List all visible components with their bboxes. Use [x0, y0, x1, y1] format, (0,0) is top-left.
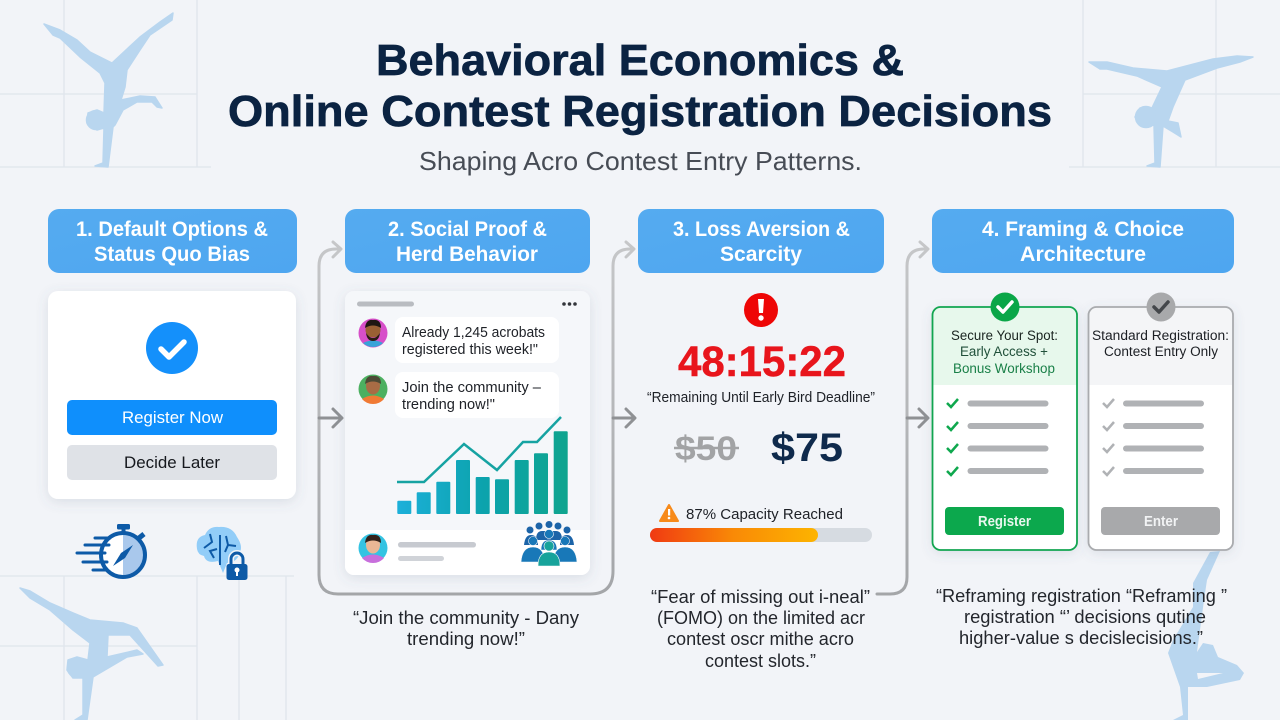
heading: step 1: [48, 209, 297, 273]
countdown timer: 48:15:22: [678, 338, 846, 386]
panel: loss aversion: [638, 209, 884, 671]
icon: alert: [744, 293, 778, 327]
caption: framing: “Reframing registration “Reframing ”: [936, 586, 1227, 606]
heading: step 1: Status Quo Bias: [94, 243, 250, 266]
caption: social proof: “Join the community - Dany: [353, 608, 579, 628]
caption: framing: registration “’ decisions qutine: [964, 607, 1206, 627]
heading: step 4: Architecture: [1020, 243, 1146, 266]
countdown caption: “Remaining Until Early Bird Deadline”: [647, 390, 875, 406]
caption: scarcity: contest oscr mithe acro: [667, 629, 854, 649]
comment 1: Already 1,245 acrobats: [402, 325, 545, 341]
capacity indicator: 87% Capacity Reached: [686, 506, 843, 523]
heading: step 2: Herd Behavior: [396, 243, 538, 266]
heading: step 4: [932, 209, 1234, 273]
caption: social proof: trending now!”: [407, 629, 525, 649]
card: registration default: Register Now: [122, 409, 223, 427]
title: Behavioral Economics &: [376, 36, 904, 85]
heading: step 2: 2. Social Proof &: [388, 218, 547, 241]
card: standard option: Standard Registration:: [1092, 328, 1229, 343]
icon: stopwatch: [77, 524, 145, 577]
heading: step 1: 1. Default Options &: [76, 218, 268, 241]
card: premium option: [932, 292, 1077, 550]
title: Online Contest Registration Decisions: [228, 87, 1052, 136]
card: premium option: Early Access +: [960, 344, 1048, 359]
card: registration default: Decide Later: [124, 454, 221, 472]
comment 1: [358, 317, 559, 363]
heading: step 3: 3. Loss Aversion &: [673, 218, 850, 241]
silhouette: gymnast bottom right: [1168, 551, 1244, 720]
panel: framing: [932, 209, 1234, 648]
subtitle: Shaping Acro Contest Entry Patterns.: [419, 146, 862, 176]
footer user row: [358, 534, 476, 563]
comment 2: trending now!": [402, 397, 495, 413]
heading: step 4: 4. Framing & Choice: [982, 218, 1184, 241]
card: premium option: Secure Your Spot:: [951, 328, 1058, 343]
card: premium option: Bonus Workshop: [953, 361, 1055, 376]
bar chart: registrations trend: [397, 417, 568, 514]
panel: default options: [48, 209, 297, 580]
card: registration default: [48, 291, 296, 499]
heading: step 3: Scarcity: [720, 243, 802, 266]
silhouette: gymnast top left: [44, 13, 173, 167]
card: standard option: [1088, 292, 1233, 550]
caption: scarcity: “Fear of missing out i-neal”: [651, 587, 870, 607]
caption: framing: [936, 586, 1227, 648]
comment 1: registered this week!": [402, 342, 538, 358]
panel: social proof: [345, 209, 590, 649]
card: social feed: [345, 291, 590, 575]
silhouette: gymnast top right: [1089, 56, 1253, 167]
old price: $50: [675, 430, 737, 468]
capacity indicator: [650, 505, 872, 542]
card: premium option: Register: [978, 514, 1031, 530]
comment 2: Join the community –: [402, 380, 542, 396]
silhouette: gymnast bottom left: [20, 588, 163, 720]
heading: step 2: [345, 209, 590, 273]
heading: step 3: [638, 209, 884, 273]
card: standard option: Contest Entry Only: [1104, 344, 1218, 359]
caption: scarcity: [651, 587, 870, 671]
icon: crowd: [521, 521, 577, 566]
caption: scarcity: contest slots.”: [705, 651, 816, 671]
new price: $75: [771, 426, 843, 470]
title: [228, 36, 1052, 136]
comment 2: [358, 372, 559, 418]
icon: brain with lock: [197, 527, 248, 580]
caption: scarcity: (FOMO) on the limited acr: [657, 608, 865, 628]
caption: framing: higher-value s decislecisions.”: [959, 628, 1203, 648]
arrows into panels: [319, 409, 928, 427]
card: standard option: Enter: [1144, 514, 1178, 530]
caption: social proof: [353, 608, 579, 649]
process flow connectors: [319, 242, 928, 594]
